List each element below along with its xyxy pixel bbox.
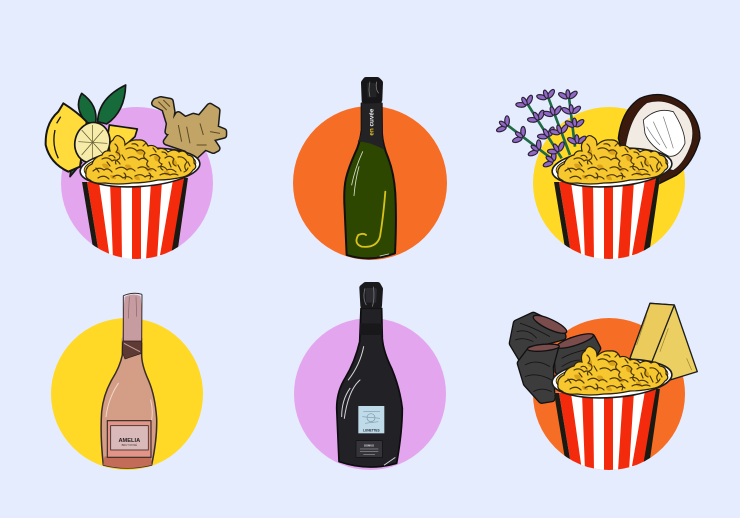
orange circle (293, 106, 447, 260)
front label: LUNETTES (363, 429, 380, 433)
panel: lavender and coconut popcorn (494, 87, 700, 265)
orange circle (533, 318, 685, 470)
monogram J (356, 192, 385, 247)
popcorn bucket (79, 136, 201, 265)
label text: en cuvée (369, 108, 376, 136)
panel: prunes and cheese popcorn (513, 303, 697, 476)
yellow circle (533, 107, 685, 259)
purple circle (61, 107, 213, 259)
front label (358, 406, 384, 433)
icon: ginger root (155, 100, 223, 156)
label: AMELIA (118, 438, 140, 444)
label: BRUT ROSÉ (122, 442, 137, 447)
icon: prunes (513, 312, 597, 400)
label (107, 421, 151, 457)
lower label (356, 441, 382, 457)
popcorn bucket (551, 136, 673, 265)
panel: rosé bottle (51, 293, 203, 470)
icon: black bottle (337, 285, 402, 467)
icon: cheese wedge (630, 303, 697, 380)
panel: lemon and ginger popcorn (46, 85, 223, 265)
icon: rosé bottle (101, 293, 157, 468)
illustration grid (44, 77, 701, 470)
icon: lemon and leaves (46, 85, 137, 177)
yellow circle (51, 318, 203, 470)
lower label: DOMUS (364, 443, 374, 447)
icon: lavender sprigs (494, 87, 588, 171)
panel: black bottle (294, 285, 446, 470)
icon: green bottle (344, 80, 396, 258)
purple circle (294, 318, 446, 470)
panel: green sparkling wine bottle (293, 80, 447, 260)
icon: coconut (618, 95, 700, 185)
popcorn bucket (551, 347, 673, 476)
